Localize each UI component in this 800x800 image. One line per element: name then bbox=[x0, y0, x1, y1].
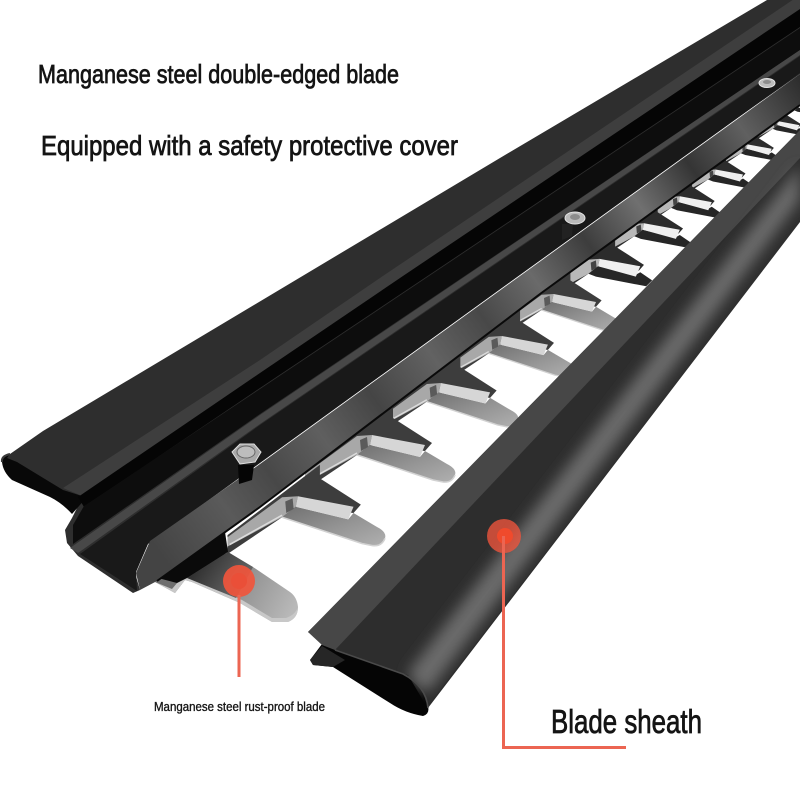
sheath tab bbox=[310, 646, 345, 667]
channel body and rim bbox=[65, 10, 800, 593]
sheath top lip bbox=[308, 130, 800, 650]
lower blade sheath bbox=[308, 130, 800, 716]
callout: manganese blade bbox=[223, 565, 255, 677]
sheath open end bbox=[2, 454, 86, 514]
blade plate bbox=[136, 74, 800, 590]
rail channel: lower panel bbox=[80, 56, 800, 591]
front tooth bbox=[155, 532, 298, 622]
sheath lower highlight bbox=[408, 165, 800, 690]
sheath open end bbox=[310, 644, 428, 716]
plate lower edge bbox=[157, 105, 800, 581]
near teeth bbox=[228, 270, 620, 554]
blade teeth bbox=[155, 96, 800, 622]
sheath fold strip bbox=[63, 0, 800, 496]
bolt 1 bbox=[232, 444, 261, 484]
sheath top surface bbox=[7, 0, 800, 496]
rail channel: upper panel bbox=[73, 28, 800, 544]
rail ridge bbox=[70, 50, 800, 553]
sheath end curl bbox=[335, 650, 428, 708]
heading: safety cover: Equipped with a safety protective cover bbox=[41, 130, 458, 161]
callout: blade sheath bbox=[487, 519, 626, 749]
bolt 3 bbox=[759, 78, 775, 88]
label: rust-proof blade: Manganese steel rust-proof blade bbox=[154, 699, 325, 714]
top rail groove bbox=[78, 9, 800, 507]
sheath body bbox=[308, 130, 800, 708]
far teeth bbox=[550, 96, 800, 300]
label: blade sheath: Blade sheath bbox=[551, 703, 702, 740]
upper sheath bbox=[2, 0, 800, 514]
bolt 2 bbox=[562, 212, 585, 240]
heading: double-edged blade: Manganese steel double-edged blade bbox=[38, 59, 399, 89]
